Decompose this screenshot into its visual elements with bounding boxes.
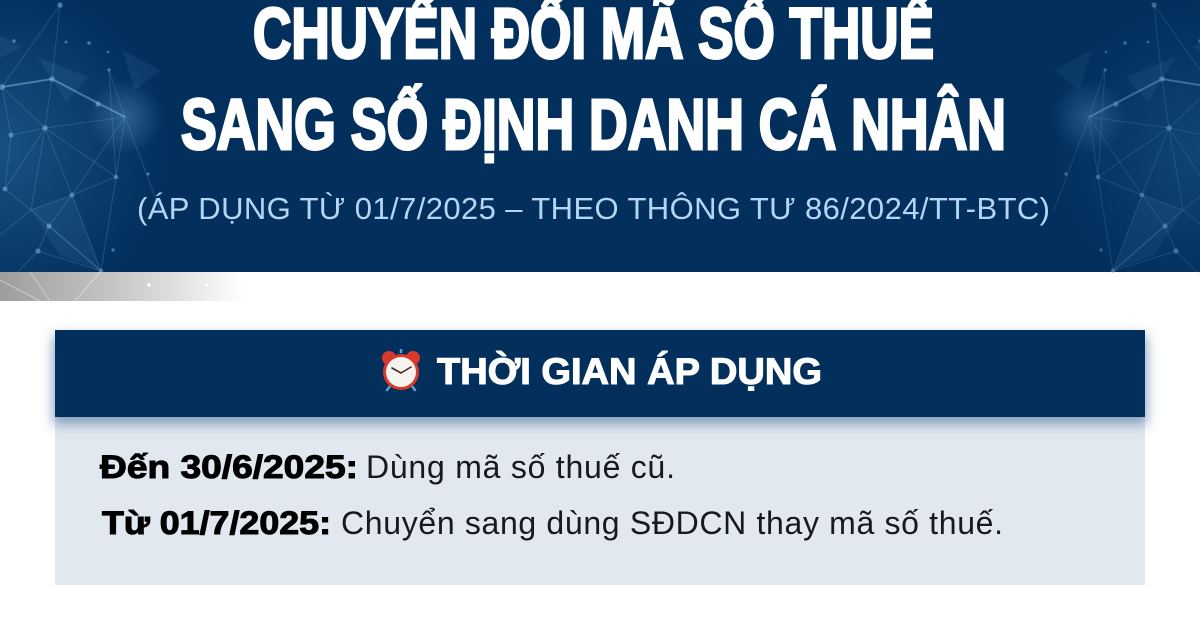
text: until 30/6/2025 bbox=[100, 449, 675, 485]
text: until 30/6/2025: Dùng mã số thuế cũ. bbox=[366, 449, 675, 485]
banner bottom grey strip bbox=[0, 272, 245, 301]
icon: alarm clock bbox=[382, 349, 420, 390]
subtitle: (ÁP DỤNG TỪ 01/7/2025 – THEO THÔNG TƯ 86/2024/TT-BTC) bbox=[137, 191, 1050, 226]
network pattern: right bbox=[1051, 2, 1200, 290]
text: from 01/7/2025: Từ 01/7/2025: bbox=[102, 505, 331, 541]
panel: thời gian áp dụng bbox=[53, 330, 1147, 585]
title bbox=[181, 0, 1006, 165]
header shadow bbox=[53, 336, 1147, 424]
network pattern: left bbox=[0, 2, 163, 290]
panel body bbox=[55, 417, 1145, 585]
banner background bbox=[0, 0, 1200, 272]
text: from 01/7/2025: Chuyển sang dùng SĐDCN thay mã số thuế. bbox=[341, 505, 1003, 541]
text: until 30/6/2025: Đến 30/6/2025: bbox=[100, 449, 358, 485]
panel heading: THỜI GIAN ÁP DỤNG bbox=[437, 350, 822, 392]
panel header bar bbox=[55, 330, 1145, 417]
